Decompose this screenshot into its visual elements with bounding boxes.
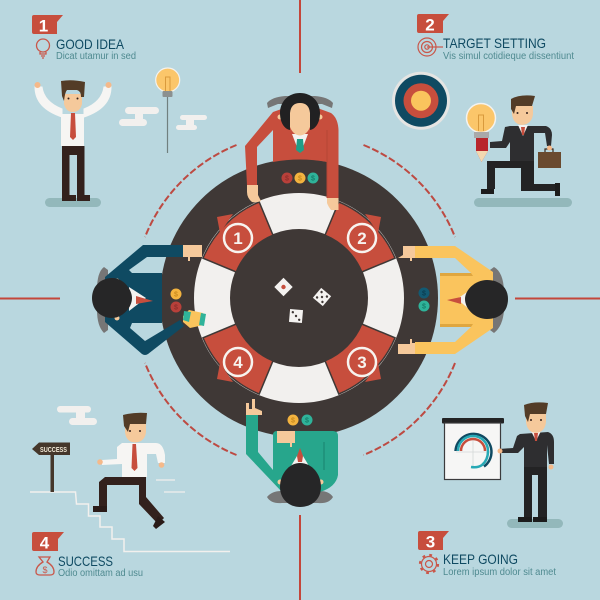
coins: $: [311, 176, 315, 182]
red segment 1: [203, 202, 273, 272]
icon: light bulb: [36, 39, 50, 58]
dice: [274, 278, 331, 323]
step 3 label: 3: [426, 532, 435, 552]
clouds: [57, 406, 97, 425]
dashed arcs around table: [145, 145, 455, 455]
coins: $: [422, 290, 426, 298]
badge 1: [32, 15, 63, 34]
step 2 label: [417, 14, 574, 62]
icon: money bag: $: [42, 565, 48, 575]
step 4 label: 4: [40, 534, 50, 552]
subtext good idea: Dicat utamur in sed: [56, 51, 136, 62]
segment numbers: 1: [233, 229, 243, 248]
success sign: SUCCESS: [40, 447, 67, 454]
icon: gear: [420, 555, 438, 573]
step 3 label: [418, 531, 556, 578]
badge 4: [32, 532, 64, 551]
badge 3: [418, 531, 449, 550]
coins: $: [174, 292, 178, 298]
person 3: presenting at board: [442, 402, 563, 528]
heading success: SUCCESS: [58, 553, 113, 569]
subtext keep going: Lorem ipsum dolor sit amet: [443, 567, 556, 578]
red segment 4: [203, 324, 273, 394]
coins: $: [305, 418, 309, 424]
segment numbers: 3: [357, 353, 367, 372]
white ring: [212, 211, 386, 385]
seated person bottom: green: [246, 399, 338, 507]
icon: target: [418, 38, 443, 56]
red segment 3: [325, 324, 395, 394]
coins: $: [298, 176, 302, 182]
success sign: [32, 442, 70, 492]
person 2: running with briefcase and pencil bulb: [466, 95, 572, 207]
presentation board: [442, 418, 504, 480]
person 4: climbing stairs to success: [30, 406, 230, 552]
subtext target setting: Vis simul cotidieque dissentiunt: [443, 51, 574, 62]
coins: $: [291, 418, 295, 424]
segment numbers: [233, 229, 367, 372]
light bulb on stick with clouds: [119, 68, 207, 153]
coins: $: [422, 304, 426, 310]
round table: [160, 159, 438, 437]
heading keep going: KEEP GOING: [443, 551, 518, 567]
coins: $: [174, 304, 178, 312]
person 1: arms raised: [34, 80, 112, 207]
target board: [392, 72, 450, 130]
step 2 label: 2: [425, 16, 435, 34]
heading target setting: TARGET SETTING: [443, 35, 546, 51]
segment numbers: 4: [233, 353, 243, 372]
step 1 label: [32, 15, 136, 62]
coins: $: [285, 176, 289, 182]
red segment 2: [325, 202, 395, 272]
coins: [170, 172, 430, 426]
stairs: [30, 492, 230, 552]
segment numbers: 2: [357, 229, 367, 248]
numbered circles: [224, 224, 376, 376]
badge 2: [417, 14, 449, 33]
seated person right: yellow: [398, 246, 508, 354]
subtext success: Odio omittam ad usu: [58, 568, 143, 579]
step 4 label: [32, 532, 143, 579]
seated person top: red: [245, 93, 338, 210]
heading good idea: GOOD IDEA: [56, 36, 125, 52]
seated person left: navy: [92, 245, 206, 355]
speed lines: [156, 480, 185, 492]
step 1 label: 1: [39, 16, 48, 36]
